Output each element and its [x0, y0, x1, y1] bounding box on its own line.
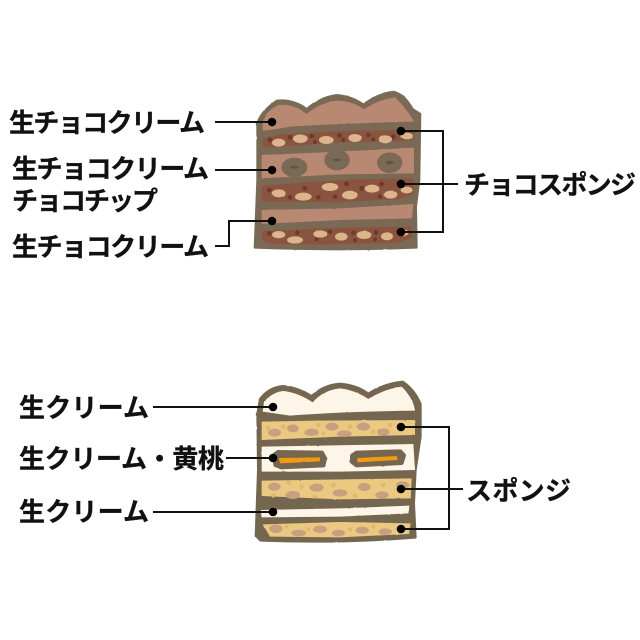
top chocolate sponge layer — [263, 130, 414, 147]
cake outline — [255, 92, 420, 249]
bottom chocolate sponge layer — [262, 227, 412, 245]
marker dots: chocolate cake — [268, 118, 405, 236]
leader line: bottom chocolate cream — [215, 221, 272, 246]
middle chocolate cream layer with chips — [262, 148, 414, 178]
label: sponge: スポンジ — [466, 476, 571, 506]
top chocolate cream layer — [263, 97, 414, 131]
marker dots: peach cake — [269, 403, 405, 533]
middle sponge layer — [262, 478, 412, 499]
leader line: bottom cream — [153, 511, 273, 513]
bracket: chocolate sponge — [401, 131, 458, 232]
illustration: chocolate cake slice — [255, 92, 420, 249]
label: bottom chocolate cream: 生チョコクリーム — [12, 232, 209, 262]
bracket: sponge — [401, 427, 463, 529]
bottom sponge layer — [263, 522, 411, 537]
label: top chocolate cream: 生チョコクリーム — [9, 108, 205, 138]
label: cream and peach: 生クリーム・黄桃 — [19, 444, 224, 474]
thin cream layer — [261, 506, 410, 517]
label: bottom cream: 生クリーム — [19, 497, 149, 527]
illustration: peach cream cake slice — [256, 382, 420, 541]
cake outline — [256, 382, 420, 541]
leader line: cream and peach — [226, 457, 273, 459]
top sponge layer — [262, 420, 415, 440]
leader line: top cream — [153, 406, 273, 408]
cream layer with peach — [262, 444, 415, 472]
leader line: chocolate cream and chips — [215, 169, 272, 171]
middle chocolate sponge layer — [262, 178, 414, 202]
label: top cream: 生クリーム — [19, 393, 149, 423]
label: chocolate cream: 生チョコクリーム — [12, 154, 209, 184]
leader line: top chocolate cream — [215, 121, 272, 123]
bottom chocolate cream layer — [262, 204, 413, 224]
label: chocolate chips: チョコチップ — [12, 186, 158, 216]
top cream layer — [263, 387, 415, 416]
label: chocolate sponge: チョコスポンジ — [464, 170, 636, 200]
